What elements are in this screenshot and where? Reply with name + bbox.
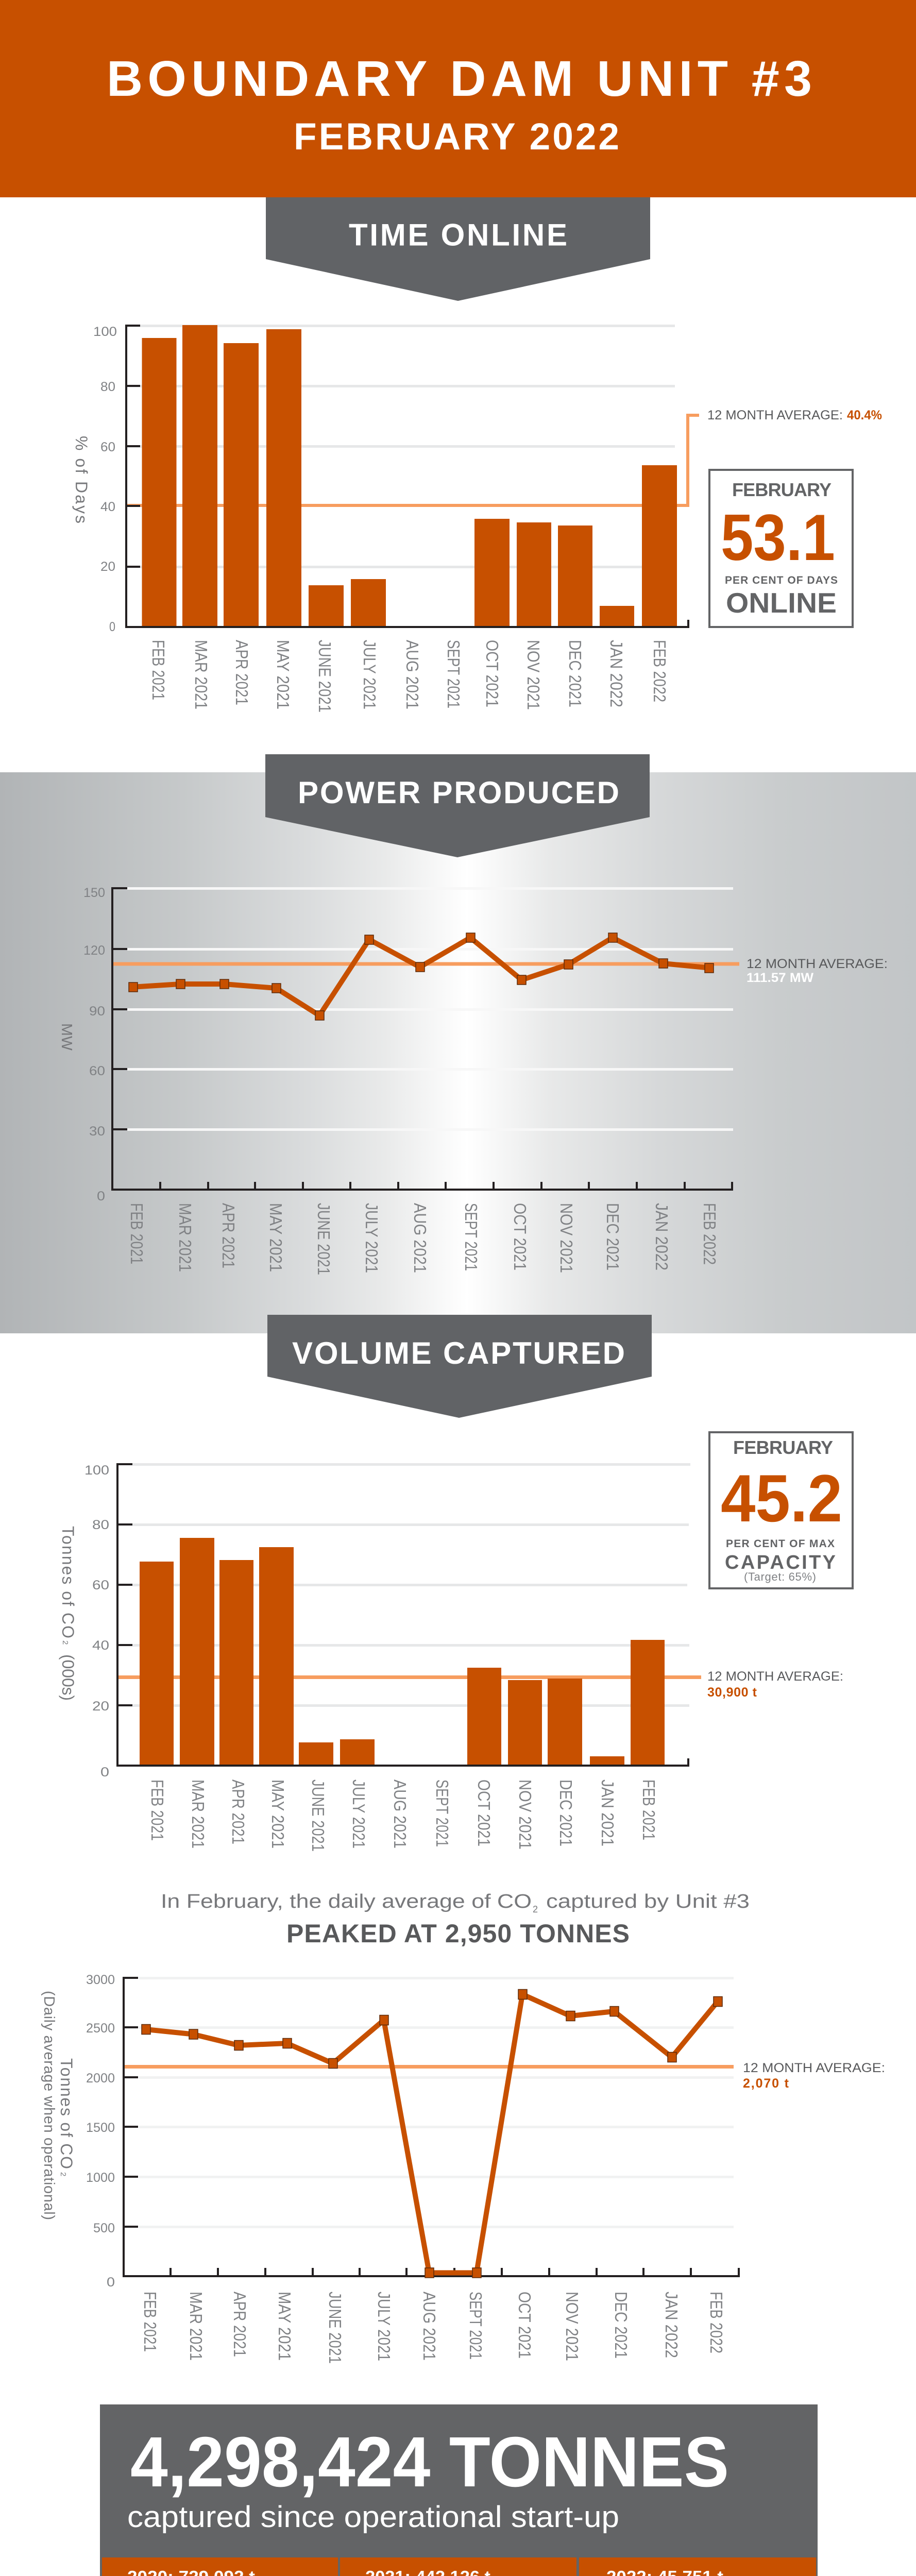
x axis labels: MAR 2021 bbox=[189, 1780, 208, 1849]
x axis labels: MAR 2021 bbox=[192, 640, 211, 709]
x axis labels: FEB 2022 bbox=[700, 1203, 719, 1265]
y axis labels: 0 bbox=[97, 1189, 105, 1204]
y axis labels: 0 bbox=[109, 620, 115, 634]
x axis labels: JULY 2021 bbox=[375, 2292, 394, 2361]
y axis labels: 100 bbox=[84, 1463, 109, 1478]
y axis labels: 30 bbox=[89, 1124, 105, 1139]
x axis labels: APR 2021 bbox=[229, 1780, 248, 1844]
y axis labels bbox=[83, 886, 105, 1204]
data line bbox=[146, 1994, 718, 2273]
y axis labels bbox=[84, 1463, 109, 1780]
axes bbox=[117, 1464, 688, 1766]
y axis title: 2 bbox=[61, 1640, 70, 1645]
axes bbox=[126, 326, 688, 627]
callout: 53.1 per cent of days online: FEBRUARY bbox=[732, 479, 832, 500]
y axis title: Tonnes of CO bbox=[57, 2058, 76, 2169]
panel: daily average bbox=[41, 1891, 885, 2364]
x axis labels: FEB 2021 bbox=[127, 1203, 146, 1264]
x axis labels: JULY 2021 bbox=[349, 1780, 368, 1849]
x axis labels bbox=[141, 2292, 726, 2364]
x axis labels: JAN 2022 bbox=[652, 1203, 671, 1270]
x axis labels: NOV 2021 bbox=[524, 640, 543, 710]
callout: 53.1 per cent of days online: PER CENT OF DAYS bbox=[725, 574, 838, 586]
subtitle: FEBRUARY 2022 bbox=[294, 116, 619, 158]
x axis labels: NOV 2021 bbox=[563, 2292, 582, 2361]
x axis labels: JUNE 2021 bbox=[315, 640, 334, 713]
x axis labels: OCT 2021 bbox=[511, 1203, 530, 1270]
callout: 53.1 per cent of days online: 53.1 bbox=[721, 501, 835, 574]
y axis labels: 60 bbox=[89, 1064, 105, 1078]
average label bbox=[743, 2061, 885, 2091]
panel: volume captured bbox=[59, 1315, 853, 1852]
x axis labels: JAN 2021 bbox=[598, 1780, 617, 1846]
yearly total: 2022 bbox=[579, 2557, 816, 2576]
x axis labels: FEB 2022 bbox=[650, 640, 669, 702]
y axis labels: 1000 bbox=[86, 2171, 115, 2185]
y axis title: % of Days bbox=[72, 436, 91, 523]
average line bbox=[124, 2065, 734, 2069]
x axis labels: DEC 2021 bbox=[556, 1780, 575, 1846]
y axis labels: 500 bbox=[93, 2221, 115, 2235]
header banner bbox=[0, 0, 916, 197]
section heading: power produced: POWER PRODUCED bbox=[298, 775, 619, 810]
bar chart: tonnes of CO2 bbox=[59, 1463, 701, 1852]
x axis labels: OCT 2021 bbox=[483, 640, 502, 707]
caption: captured since operational start-up bbox=[127, 2500, 619, 2534]
x axis labels: JUNE 2021 bbox=[326, 2292, 345, 2364]
line chart: daily tonnes of CO2 bbox=[41, 1973, 739, 2364]
callout: 45.2 per cent of max capacity: FEBRUARY bbox=[733, 1437, 833, 1458]
x axis labels: MAY 2021 bbox=[268, 1780, 287, 1849]
axes bbox=[112, 888, 732, 1190]
y axis labels: 0 bbox=[100, 1765, 109, 1780]
y axis labels: 40 bbox=[92, 1638, 109, 1653]
section heading: volume captured: VOLUME CAPTURED bbox=[292, 1336, 625, 1370]
section heading: volume captured bbox=[267, 1315, 652, 1418]
average label: 40.4% bbox=[847, 408, 882, 422]
y axis labels bbox=[86, 1973, 115, 2290]
callout: 45.2 per cent of max capacity: (Target: 65%) bbox=[744, 1570, 816, 1583]
bar chart: per cent of days online bbox=[72, 325, 699, 713]
x axis labels: SEPT 2021 bbox=[462, 1203, 481, 1271]
y axis title: MW bbox=[58, 1023, 75, 1051]
title: BOUNDARY DAM UNIT #3 bbox=[107, 50, 812, 107]
section heading: time online bbox=[266, 197, 650, 301]
data line bbox=[133, 938, 709, 1015]
panel: power produced bbox=[0, 754, 916, 1333]
y axis labels: 1500 bbox=[86, 2121, 115, 2135]
x axis labels: JUNE 2021 bbox=[314, 1203, 333, 1275]
x axis labels bbox=[149, 640, 669, 713]
average line bbox=[112, 962, 739, 965]
x axis labels: FEB 2021 bbox=[149, 640, 168, 700]
y axis labels: 2500 bbox=[86, 2021, 115, 2036]
y axis labels: 3000 bbox=[86, 1973, 115, 1987]
y axis labels: 80 bbox=[92, 1518, 109, 1532]
total tonnes: 4,298,424 TONNES bbox=[130, 2422, 729, 2502]
x axis labels: JAN 2022 bbox=[662, 2292, 681, 2358]
x axis labels: MAY 2021 bbox=[266, 1203, 285, 1272]
y axis labels: 120 bbox=[83, 943, 105, 958]
x axis labels: NOV 2021 bbox=[557, 1203, 576, 1273]
x axis labels: SEPT 2021 bbox=[466, 2292, 485, 2360]
average line bbox=[117, 1675, 701, 1679]
x axis labels: JULY 2021 bbox=[362, 1203, 381, 1273]
x axis labels: DEC 2021 bbox=[603, 1203, 622, 1270]
callout: 45.2 per cent of max capacity: PER CENT OF MAX bbox=[726, 1538, 835, 1550]
x axis labels: APR 2021 bbox=[230, 2292, 249, 2357]
section heading: time online: TIME ONLINE bbox=[349, 217, 567, 252]
line chart: megawatts bbox=[58, 886, 739, 1275]
average label bbox=[707, 1669, 843, 1700]
x axis labels: SEPT 2021 bbox=[433, 1780, 452, 1847]
panel: total captured bbox=[100, 2404, 818, 2576]
y axis labels: 80 bbox=[100, 380, 115, 394]
y axis labels: 60 bbox=[100, 440, 115, 454]
x axis labels: MAR 2021 bbox=[176, 1203, 195, 1272]
x axis labels: APR 2021 bbox=[232, 640, 251, 705]
heading: peaked at 2,950 tonnes: PEAKED AT 2,950 TONNES bbox=[286, 1919, 630, 1948]
y axis labels: 150 bbox=[83, 886, 105, 900]
x axis labels: MAR 2021 bbox=[186, 2292, 206, 2361]
x axis labels: FEB 2021 bbox=[141, 2292, 160, 2352]
x axis labels: AUG 2021 bbox=[411, 1203, 430, 1273]
average label bbox=[747, 957, 888, 985]
x axis labels: JUNE 2021 bbox=[309, 1780, 328, 1852]
callout: 53.1 per cent of days online: ONLINE bbox=[726, 587, 837, 619]
yearly total: 2020 bbox=[102, 2557, 338, 2576]
x axis labels: FEB 2021 bbox=[148, 1780, 167, 1841]
x axis labels: OCT 2021 bbox=[515, 2292, 534, 2359]
average label: 30,900 t bbox=[707, 1685, 757, 1700]
data markers bbox=[142, 1990, 722, 2278]
y axis labels: 2000 bbox=[86, 2071, 115, 2086]
sentence: daily average of CO2 bbox=[161, 1891, 750, 1914]
average label: 12 MONTH AVERAGE: bbox=[707, 408, 843, 422]
bars bbox=[142, 325, 677, 627]
x axis labels: FEB 2021 bbox=[639, 1780, 658, 1840]
y axis labels: 60 bbox=[92, 1578, 109, 1592]
x axis labels: AUG 2021 bbox=[391, 1780, 410, 1849]
x axis labels: AUG 2021 bbox=[420, 2292, 439, 2361]
sentence: daily average of CO2: 2 bbox=[533, 1904, 538, 1914]
yearly total: 2021 bbox=[340, 2557, 576, 2576]
axes bbox=[124, 1978, 739, 2276]
callout: 45.2 per cent of max capacity bbox=[709, 1432, 853, 1588]
panel: time online bbox=[72, 197, 882, 713]
y axis labels: 20 bbox=[92, 1699, 109, 1714]
average label: 111.57 MW bbox=[747, 971, 813, 985]
x axis labels: MAY 2021 bbox=[274, 640, 293, 709]
y axis labels: 100 bbox=[93, 325, 117, 339]
x axis labels bbox=[148, 1780, 658, 1852]
x axis labels bbox=[127, 1203, 719, 1275]
sentence: daily average of CO2: In February, the daily average of CO bbox=[161, 1891, 532, 1912]
callout: 45.2 per cent of max capacity: 45.2 bbox=[721, 1461, 842, 1536]
x axis labels: OCT 2021 bbox=[474, 1780, 494, 1846]
callout: 45.2 per cent of max capacity: CAPACITY bbox=[725, 1552, 836, 1573]
average line bbox=[125, 415, 699, 505]
y axis title: (000s) bbox=[59, 1654, 77, 1701]
sentence: daily average of CO2: captured by Unit #3 bbox=[546, 1891, 750, 1912]
data markers bbox=[129, 933, 714, 1020]
x axis labels: DEC 2021 bbox=[612, 2292, 631, 2359]
x axis labels: AUG 2021 bbox=[403, 640, 422, 709]
x axis labels: SEPT 2021 bbox=[444, 640, 463, 708]
x axis labels: NOV 2021 bbox=[516, 1780, 535, 1850]
y axis labels: 20 bbox=[100, 560, 115, 574]
bars bbox=[140, 1538, 665, 1766]
average label: 12 MONTH AVERAGE: bbox=[743, 2061, 885, 2075]
y axis title: 2 bbox=[59, 2172, 67, 2176]
x axis labels: MAY 2021 bbox=[275, 2292, 294, 2361]
x axis labels: FEB 2022 bbox=[707, 2292, 726, 2353]
y axis title bbox=[41, 1991, 76, 2220]
x axis labels: APR 2021 bbox=[219, 1203, 238, 1268]
average label: 2,070 t bbox=[743, 2076, 789, 2091]
average label: 12 MONTH AVERAGE: bbox=[747, 957, 888, 971]
y axis title bbox=[59, 1526, 77, 1701]
y axis labels: 90 bbox=[89, 1004, 105, 1019]
panel background bbox=[0, 772, 916, 1333]
y axis labels: 0 bbox=[107, 2275, 115, 2290]
section heading: power produced bbox=[265, 754, 650, 857]
y axis title: Tonnes of CO bbox=[59, 1526, 77, 1638]
y axis title: (Daily average when operational) bbox=[41, 1991, 57, 2220]
x axis labels: DEC 2021 bbox=[566, 640, 585, 707]
x axis labels: JAN 2022 bbox=[607, 640, 626, 707]
y axis labels: 40 bbox=[100, 500, 115, 514]
average label: 12 MONTH AVERAGE: bbox=[707, 1669, 843, 1684]
y axis labels bbox=[93, 325, 117, 634]
x axis labels: JULY 2021 bbox=[360, 640, 379, 709]
callout: 53.1 per cent of days online bbox=[709, 470, 853, 627]
